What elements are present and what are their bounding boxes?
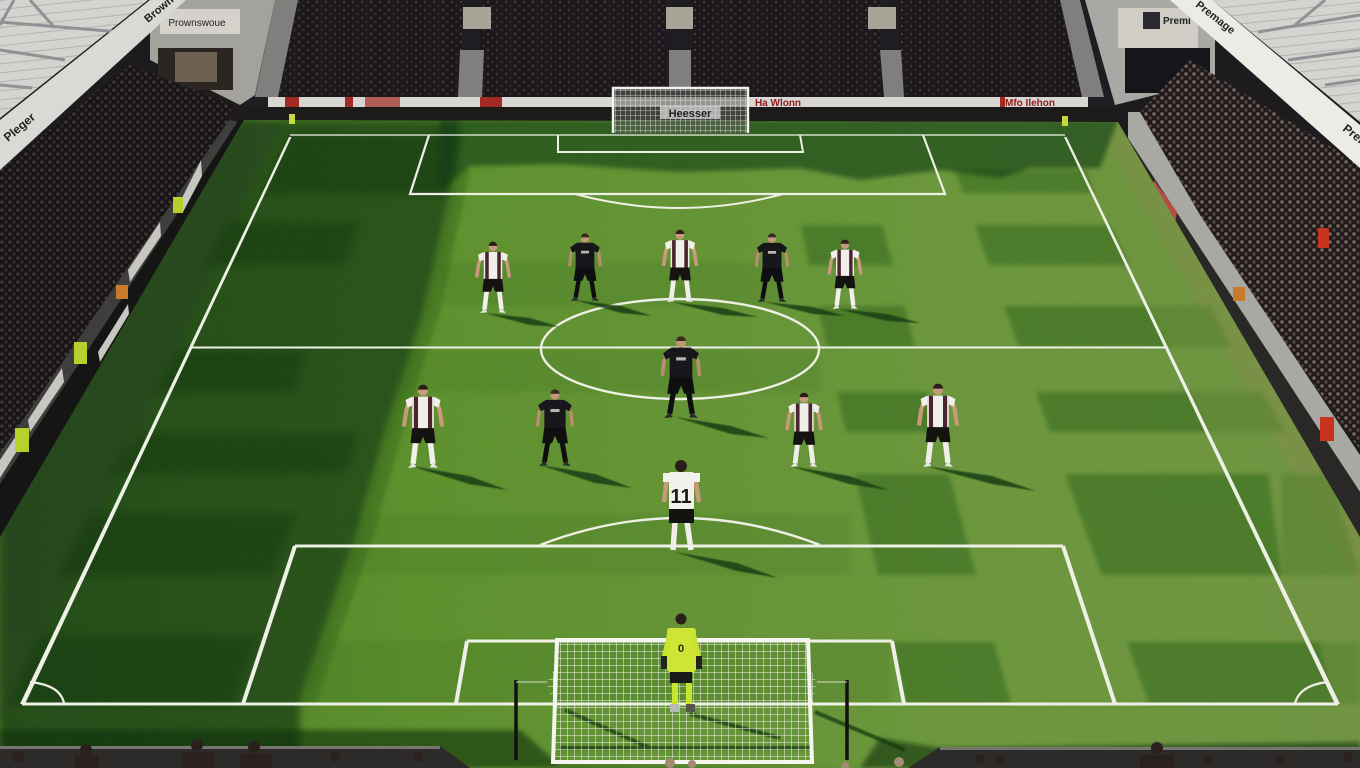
stand shadow at top (440, 120, 1118, 190)
crowd block 1 (274, 0, 462, 97)
right board red marks (1152, 180, 1177, 224)
foreground spectators by the goal (665, 757, 904, 768)
player: white 6 (919, 384, 957, 467)
right tan margin (1105, 122, 1360, 590)
centre circle (541, 299, 819, 399)
stewards (15, 197, 183, 452)
touchline right (1064, 137, 1340, 704)
far penalty arc (575, 194, 783, 208)
player: white 5 (787, 393, 821, 467)
touchline left (20, 137, 292, 704)
steward orange right (1233, 287, 1245, 301)
right roof and stand: Premage (1193, 0, 1237, 37)
left advertising deck (0, 120, 240, 487)
player: white 1 (477, 242, 509, 313)
right stand back sign (1118, 8, 1198, 48)
player: white 2 (663, 230, 697, 302)
side stand shadow (0, 120, 460, 768)
left stand back sign: Prownswoue (168, 18, 226, 29)
shadow cells inside the shaded area (10, 135, 460, 704)
foreground rail right (908, 742, 1360, 768)
bottom shadow (0, 730, 1360, 768)
player: black 1 (570, 233, 600, 301)
player: black 2 (756, 233, 788, 302)
near goal shadow (560, 710, 905, 750)
left outer margin (0, 120, 280, 725)
right boards (1128, 112, 1360, 492)
near penalty box left side (243, 546, 295, 704)
end advertising boards: Mfo Ilehon (1005, 98, 1055, 109)
player: white 3 (829, 240, 861, 309)
end advertising boards (245, 97, 1115, 122)
near six-yard box left side (456, 641, 467, 704)
grass texture (986, 164, 1360, 726)
near goal (516, 640, 847, 762)
goalkeeper: 0 (678, 643, 684, 655)
vomitory signs (463, 7, 896, 29)
aisle stairs (255, 0, 1104, 97)
corner flags (289, 114, 1068, 126)
crowd block 4 (898, 0, 1082, 97)
player: black 3 (662, 336, 700, 418)
crowd block 3 (692, 0, 884, 97)
player: white 4 (404, 385, 442, 468)
left perimeter boards (0, 160, 202, 478)
left roof and stand (0, 0, 275, 537)
corner arc right (1295, 682, 1328, 703)
left roof fascia (0, 0, 186, 170)
crowd block 2 (478, 0, 666, 97)
left roof (0, 0, 148, 118)
net support poles (516, 680, 847, 760)
near penalty box right side (1063, 546, 1115, 704)
centre faint cells (592, 265, 888, 702)
stewards red (1318, 228, 1334, 441)
near six-yard box top (467, 640, 892, 642)
left stand back sign (160, 9, 240, 34)
corner arc left (30, 682, 64, 703)
mowing checker cells (801, 170, 1335, 704)
goalkeeper (661, 614, 702, 712)
right stand back sign: Premi (1163, 16, 1191, 27)
player shadows (411, 300, 1036, 578)
halfway line (190, 346, 1168, 348)
far goal: Heesser (669, 108, 712, 120)
player: number 11 (663, 460, 700, 550)
player: black 4 (538, 389, 572, 466)
left wall (0, 118, 246, 537)
players (404, 230, 957, 550)
right roof fascia (1170, 0, 1360, 168)
pitch markings (20, 135, 1340, 704)
near penalty box top (295, 544, 1063, 548)
right roof and stand (1085, 0, 1360, 537)
top stand (245, 0, 1115, 108)
far six-yard box (558, 135, 803, 152)
near penalty arc (540, 518, 820, 545)
near six-yard box right side (892, 641, 904, 704)
fascia logo text: Pleger (1, 110, 38, 144)
right crowd (1140, 60, 1360, 450)
far goal (613, 88, 748, 133)
lighter outer right cells (1148, 306, 1360, 704)
left crowd (0, 65, 232, 453)
far penalty box (410, 135, 945, 194)
near goal line (22, 702, 1338, 706)
penumbra strip (300, 170, 470, 704)
foreground rail left (0, 739, 470, 768)
player: number 11: 11 (670, 486, 692, 508)
right roof (1212, 0, 1360, 122)
right wall (1118, 122, 1360, 537)
end advertising boards: Ha Wlonn (755, 98, 801, 109)
far goal line (290, 134, 1065, 136)
steward orange (116, 285, 128, 299)
